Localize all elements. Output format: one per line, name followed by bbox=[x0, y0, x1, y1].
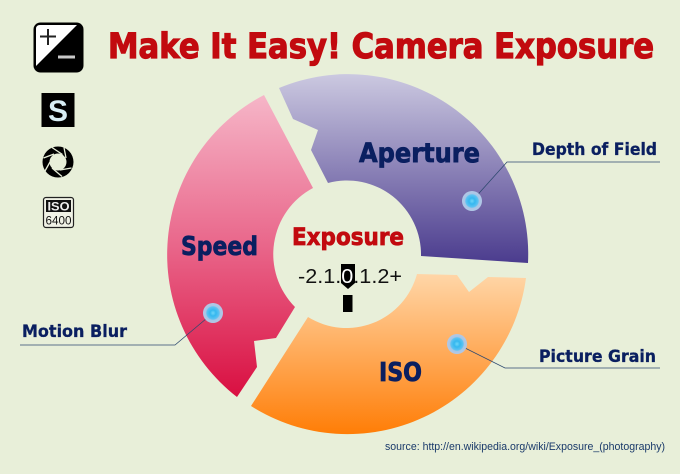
label: Aperture: Aperture bbox=[359, 138, 480, 169]
exposure scale pointer bbox=[341, 264, 355, 289]
icon: shutter speed mode bbox=[42, 93, 74, 128]
leader: motion blur bbox=[20, 313, 213, 345]
icon: ISO 6400 bbox=[44, 198, 74, 228]
label: Depth of Field: Depth of Field bbox=[532, 140, 657, 160]
icon: ISO 6400: ISO bbox=[48, 202, 70, 214]
icon: shutter speed mode: S bbox=[48, 95, 68, 128]
source note: source: http://en.wikipedia.org/wiki/Exposure_(photography) bbox=[385, 441, 665, 453]
marker: ISO dot bbox=[447, 334, 467, 354]
leader: depth of field bbox=[472, 162, 660, 201]
label: Motion Blur: Motion Blur bbox=[22, 322, 128, 342]
label: Picture Grain: Picture Grain bbox=[539, 347, 656, 367]
icon: aperture bbox=[42, 146, 74, 178]
label: ISO: ISO bbox=[379, 358, 422, 388]
segment: aperture bbox=[279, 74, 528, 263]
center heading: Exposure: Exposure bbox=[292, 223, 404, 251]
marker: aperture dot bbox=[462, 191, 482, 211]
label: Speed: Speed bbox=[181, 232, 258, 262]
exposure scale: -2.1.0.1.2+ bbox=[298, 266, 402, 288]
leader: picture grain bbox=[457, 344, 660, 368]
exposure indicator bar bbox=[343, 295, 352, 312]
icon: exposure compensation bbox=[34, 22, 84, 72]
segment: speed bbox=[167, 95, 313, 397]
icon: ISO 6400: 6400 bbox=[46, 216, 72, 228]
segment: ISO bbox=[251, 274, 526, 434]
marker: speed dot bbox=[203, 303, 223, 323]
